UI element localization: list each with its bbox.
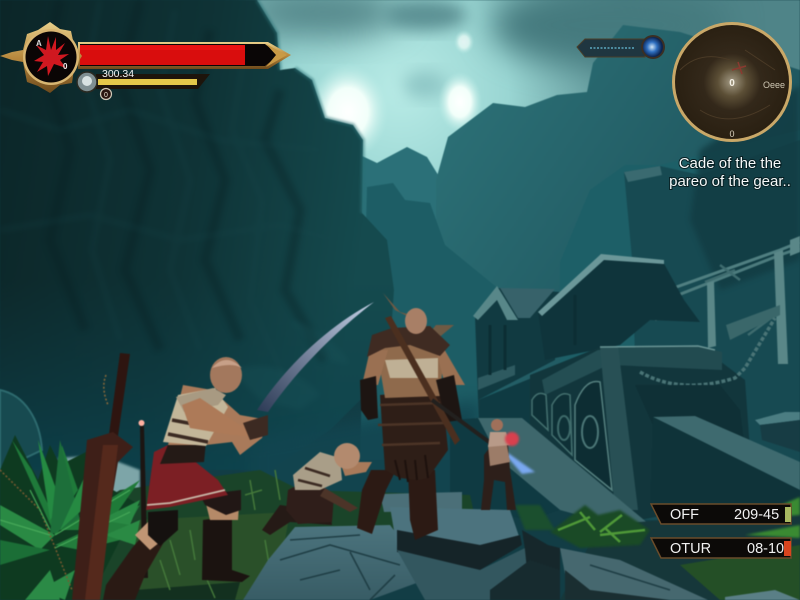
HUD: caption: pareo of the gear..: [669, 173, 791, 190]
pale rocks behind sword: [58, 455, 140, 500]
HUD: emblem medallion: 0: [63, 62, 68, 71]
hero warrior seen from behind: [357, 293, 535, 540]
fighter with curved sword: [103, 302, 374, 600]
ruined arch far left: [0, 390, 42, 470]
lower left of ramp shadow: [450, 418, 560, 520]
HUD: status row OFF: 209-45: [734, 507, 779, 523]
foreground fern: [0, 435, 140, 600]
torch staff: [138, 420, 148, 578]
HUD: caption: [669, 155, 791, 190]
HUD: blue orb indicator: [577, 35, 665, 59]
kneeling fighter: [262, 443, 372, 535]
left cliff wall: [0, 0, 394, 470]
arched vault with chain: [530, 318, 775, 520]
temple buildings: [473, 254, 700, 440]
HUD: minimap: 0: [729, 78, 735, 89]
distant enemy with glowing gauntlet: [481, 419, 519, 510]
planted sword: [72, 353, 133, 600]
HUD: small timer icon: [100, 88, 112, 100]
valley floor haze: [250, 400, 480, 520]
HUD: status row OFF: OFF: [670, 507, 699, 523]
HUD: emblem medallion: [0, 22, 82, 93]
HUD: small timer icon: 0: [104, 92, 108, 99]
central stairway ramp: [475, 418, 650, 525]
stone plinth steps: [243, 492, 800, 600]
HUD: skull coin icon: [77, 72, 97, 92]
HUD: minimap: [672, 22, 792, 142]
HUD: stamina bar: [96, 68, 210, 89]
HUD: minimap: Oeee: [763, 80, 785, 90]
HUD: status row OTUR: OTUR: [670, 541, 711, 557]
wooden gantry: [480, 236, 800, 385]
HUD: stamina bar: 300.34: [102, 68, 134, 80]
HUD: status row OFF: [651, 504, 791, 524]
right stone ramp and shed: [650, 412, 800, 540]
HUD: caption: Cade of the the: [679, 155, 781, 172]
right ground and foliage: [515, 497, 800, 600]
lower backdrop: [0, 300, 800, 600]
HUD: status row OTUR: [651, 538, 791, 558]
HUD: emblem medallion: A: [36, 39, 42, 48]
far mountains: [360, 25, 800, 520]
HUD: minimap: 0: [729, 129, 735, 139]
HUD: health bar: [78, 42, 291, 69]
HUD: status row OTUR: 08-10: [747, 541, 784, 557]
grass ground left: [0, 470, 480, 600]
